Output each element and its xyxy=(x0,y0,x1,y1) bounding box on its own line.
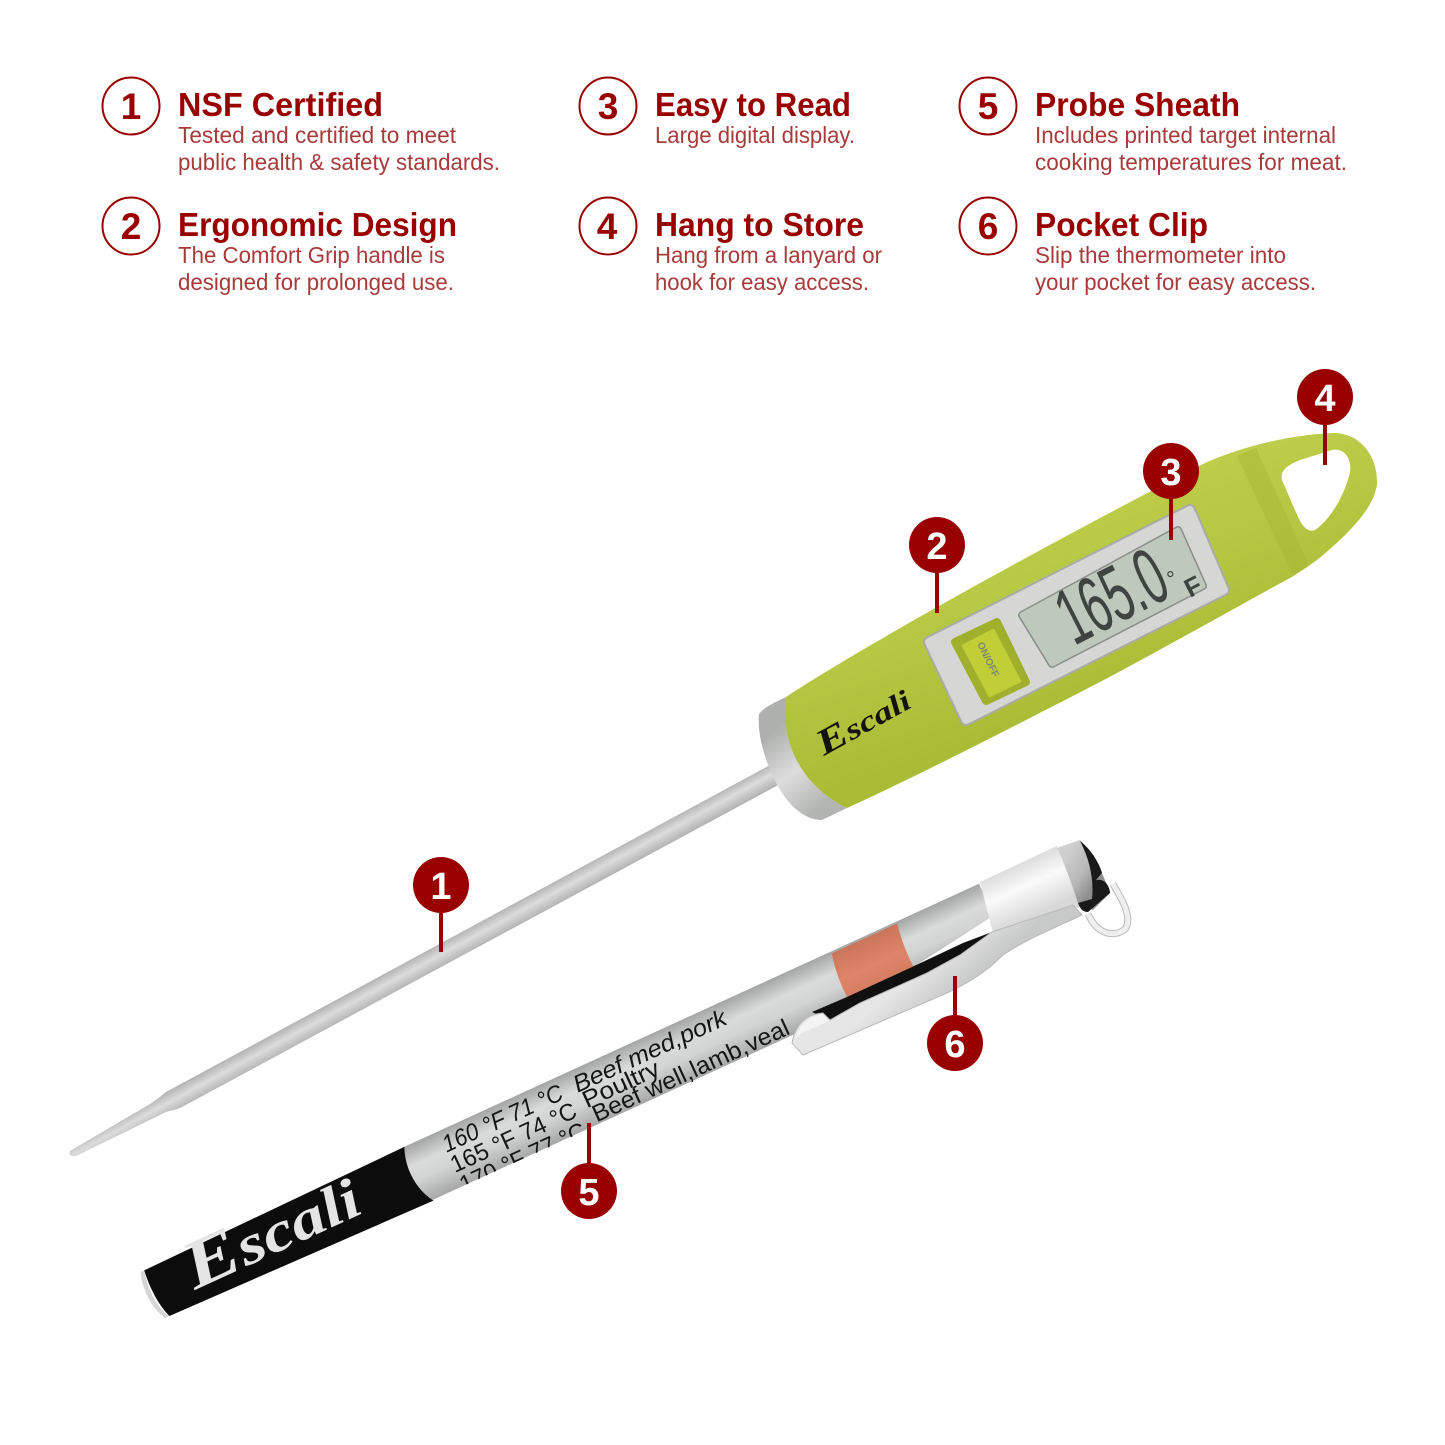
feature 5: Probe Sheath: Probe Sheath xyxy=(1035,86,1240,123)
callout 5: 5 xyxy=(578,1172,600,1214)
feature 3: Easy to Read: Easy to Read xyxy=(655,86,851,123)
sheath opening xyxy=(1078,841,1110,912)
sheath open end xyxy=(1057,840,1110,910)
unit: F xyxy=(1179,569,1207,603)
feature 2: Ergonomic Design: 2 xyxy=(121,206,141,247)
feature 5: Probe Sheath: cooking temperatures for meat. xyxy=(1035,149,1347,175)
printed cooking temperatures: 160 °F 71 °C xyxy=(438,1079,568,1158)
temperature reading: 165.0 xyxy=(1041,531,1182,661)
callout 3 xyxy=(1143,443,1199,540)
printed cooking temperatures: 170 °F 77 °C xyxy=(455,1117,590,1199)
sheath collar xyxy=(980,846,1081,933)
callout 6: 6 xyxy=(944,1024,966,1066)
feature 1: NSF Certified: NSF Certified xyxy=(178,86,383,123)
feature 6: Pocket Clip: 6 xyxy=(978,206,998,247)
printed cooking temperatures: Beef med,pork xyxy=(569,1004,733,1098)
printed cooking temperatures: 165 °F 74 °C xyxy=(446,1097,581,1179)
feature 6: Pocket Clip: Slip the thermometer into xyxy=(1035,242,1286,268)
feature 2: Ergonomic Design: Ergonomic Design xyxy=(178,206,457,243)
feature 4: Hang to Store: Hang to Store xyxy=(655,206,864,243)
callout 6 xyxy=(927,976,983,1071)
feature 5: Probe Sheath xyxy=(960,78,1347,175)
feature list xyxy=(102,78,1347,295)
feature 2: Ergonomic Design: The Comfort Grip handle is xyxy=(178,242,445,268)
callout 4 xyxy=(1297,369,1353,465)
callout 1 xyxy=(413,857,469,952)
callout 5 xyxy=(561,1123,617,1219)
feature 5: Probe Sheath: 5 xyxy=(978,86,998,127)
hanging loop xyxy=(1088,884,1128,934)
handle logo: Escali xyxy=(807,679,917,764)
silver sheath tube xyxy=(397,884,1004,1205)
green handle xyxy=(785,433,1377,808)
white end rim xyxy=(137,1269,169,1321)
feature 1: NSF Certified: public health & safety standards. xyxy=(178,149,500,175)
feature 1: NSF Certified: Tested and certified to meet xyxy=(178,122,457,148)
callout 2: 2 xyxy=(926,526,948,568)
feature 1: NSF Certified: 1 xyxy=(121,86,141,127)
probe xyxy=(69,764,782,1156)
callout 2 xyxy=(909,517,965,613)
degree sign: ° xyxy=(1163,565,1182,591)
feature 2: Ergonomic Design: designed for prolonged use. xyxy=(178,269,454,295)
black clip gap xyxy=(812,932,992,1020)
feature 2: Ergonomic Design xyxy=(102,198,457,295)
temperature band xyxy=(828,923,917,999)
handle fold shading xyxy=(1237,448,1309,576)
callout 4: 4 xyxy=(1314,378,1336,420)
callout 1: 1 xyxy=(430,866,452,908)
feature 5: Probe Sheath: Includes printed target internal xyxy=(1035,122,1336,148)
on/off button xyxy=(955,622,1026,701)
printed cooking temperatures: Poultry xyxy=(578,1055,664,1114)
feature 1: NSF Certified xyxy=(102,78,500,175)
feature 4: Hang to Store: 4 xyxy=(597,206,618,247)
feature 4: Hang to Store: hook for easy access. xyxy=(655,269,869,295)
metal collar xyxy=(759,697,847,820)
feature 6: Pocket Clip xyxy=(960,198,1316,295)
feature 6: Pocket Clip: your pocket for easy access. xyxy=(1035,269,1316,295)
feature 4: Hang to Store: Hang from a lanyard or xyxy=(655,242,882,268)
LCD display xyxy=(1022,530,1207,664)
on/off button: ON/OFF xyxy=(974,640,1001,679)
sheath logo: Escali xyxy=(168,1156,372,1304)
callout 3: 3 xyxy=(1160,452,1182,494)
pocket clip xyxy=(792,905,1082,1055)
steel faceplate xyxy=(929,510,1224,720)
black sheath end xyxy=(141,1145,433,1323)
clip head highlight xyxy=(795,1014,829,1040)
printed cooking temperatures: Beef well,lamb,veal xyxy=(588,1014,794,1128)
probe sheath xyxy=(128,840,1128,1336)
feature 3: Easy to Read xyxy=(580,78,855,148)
thermometer xyxy=(69,433,1377,1156)
printed cooking temperatures xyxy=(444,1010,790,1184)
feature 3: Easy to Read: 3 xyxy=(598,86,618,127)
feature 6: Pocket Clip: Pocket Clip xyxy=(1035,206,1208,243)
feature 3: Easy to Read: Large digital display. xyxy=(655,122,855,148)
feature 4: Hang to Store xyxy=(580,198,882,295)
